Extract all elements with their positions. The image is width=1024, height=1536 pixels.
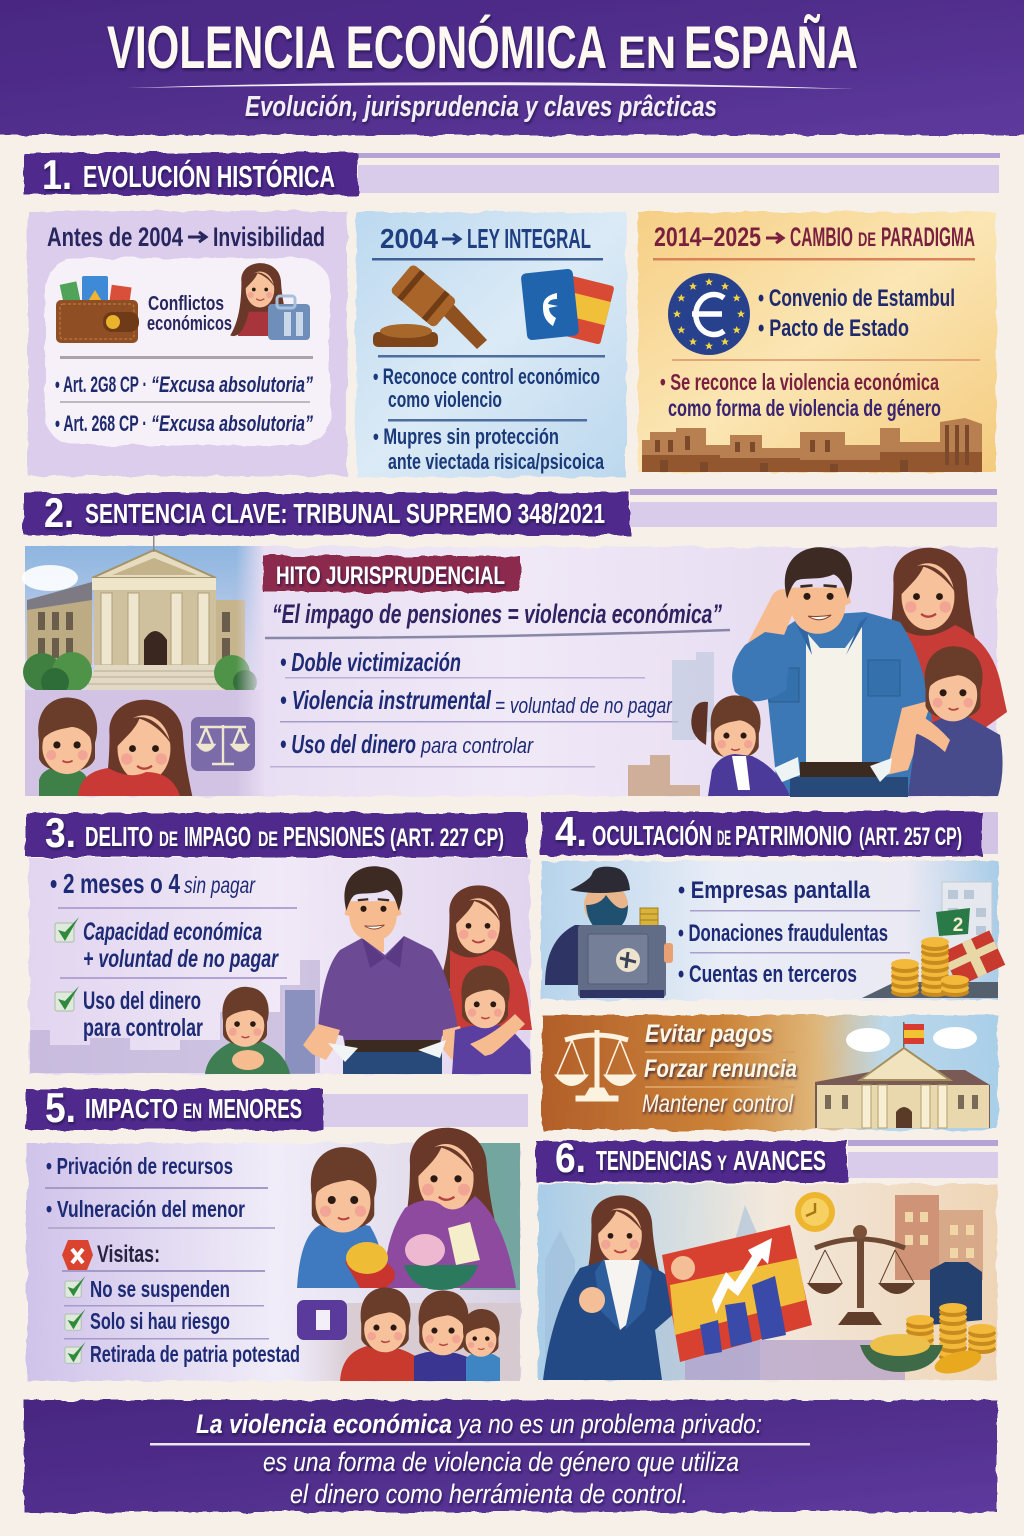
conclusion text: La violencia económica [196,1409,452,1439]
title: EN [618,27,676,78]
item: capacidad economica: + voluntad de no pagar [83,945,279,973]
illustration: family with empty pockets [205,866,532,1074]
section 2 heading: SENTENCIA CLAVE: TRIBUNAL SUPREMO 348/2021 [85,498,605,529]
conclusion text [196,1409,762,1509]
section 3 heading: DE [159,828,178,851]
conclusion text: ya no es un problema privado: [456,1409,762,1439]
label: conflictos economicos: económicos [147,313,232,335]
illustration: businesswoman [543,1195,692,1380]
visit rule: retirada [65,1341,300,1367]
label: conflictos economicos: Conflictos [148,293,224,315]
bullet: reconoce: • Reconoce control económico [373,364,600,389]
section 6 heading: AVANCES [733,1145,826,1176]
conclusion banner [24,1400,997,1512]
bullet: 2 meses o 4: sin pagar [184,872,256,898]
panel title: CAMBIO [790,222,853,252]
subtitle: Evolución, jurisprudencia y claves prâcticas [245,91,717,123]
bullet: violencia instrumental: = voluntad de no pagar [495,693,673,718]
section 3 heading: (ART. 227 CP) [390,824,504,852]
list: convenio: • Convenio de Estambul [758,285,955,312]
list: asset hiding: • Donaciones fraudulentas [678,920,888,947]
bullet: mupres [373,424,605,474]
label: visitas: Visitas: [97,1241,160,1268]
bullet: art 268 second [55,411,313,436]
icon: gold clock [795,1192,835,1232]
section 3 heading: IMPAGO [184,821,251,852]
fade edge [236,546,264,796]
icon: woman with bag [230,263,310,340]
section 4 heading [541,808,998,856]
tag: hito jurisprudencial: HITO JURISPRUDENCIAL [276,562,505,590]
skyline background [30,960,320,1073]
header banner [0,0,1024,135]
list: convenio: • Pacto de Estado [758,315,909,342]
section 5 heading: MENORES [208,1093,302,1124]
section 4 heading: PATRIMONIO [735,820,852,851]
bullet: art 268 second: • Art. 268 CP · [55,411,147,436]
visit rule: no se suspenden [65,1276,230,1302]
panel: impacto en menores [27,1128,520,1381]
bullet: violencia instrumental: • Violencia instrumental [280,685,492,715]
label: conflictos economicos [147,293,232,335]
list: evitar pagos: Forzar renuncia [644,1055,797,1083]
icon: EU euro circle [668,273,750,355]
statement [660,369,941,421]
illustration: coins and building: 2 [953,915,963,936]
icon: check second [55,986,79,1011]
section 2 heading: 2. [44,489,74,536]
panel: ocultacion de patrimonio [541,861,1005,1000]
panel: objetivos [542,1015,998,1130]
bullet: art 268: • Art. 2G8 CP · [55,372,147,397]
tag: hito jurisprudencial [263,556,520,592]
item: capacidad economica [83,918,279,973]
bullet: 2 meses o 4: • 2 meses o 4 [50,868,180,899]
bullet: uso del dinero: para controlar [420,733,534,758]
section 6 heading [536,1134,998,1182]
list: privacion: • Privación de recursos [46,1153,233,1179]
bullet: doble victimizacion: • Doble victimización [280,647,461,677]
skyline background [545,1195,983,1380]
panel: tendencias y avances [538,1184,997,1380]
bullet: uso del dinero: • Uso del dinero [280,729,416,759]
panel: antes de 2004 [28,211,347,476]
section 6 heading: Y [717,1152,727,1175]
icon: scales tile [191,717,255,771]
section 5 heading: 5. [45,1084,76,1131]
conclusion text: es una forma de violencia de género que utiliza [263,1447,739,1477]
title rule [127,82,854,89]
panel title: DE [858,230,876,251]
section 4 heading: 4. [555,808,587,855]
panel title [47,222,325,252]
illustration: family [628,547,1007,797]
skyline [642,418,982,472]
illustration: hooded man with safe [545,867,673,998]
list: asset hiding: • Cuentas en terceros [678,961,857,988]
section 1 heading [24,151,1000,198]
section 3 heading: DE [258,828,278,851]
section 3 heading [26,809,527,857]
illustration: children [290,1287,520,1381]
title: ESPAÑA [684,14,858,81]
panel: sentencia clave [22,536,1007,798]
icon: wallet with cards [56,276,139,343]
section 3 heading: DELITO [85,821,153,852]
section 4 heading: (ART. 257 CP) [859,823,962,851]
item: uso del dinero: para controlar [83,1014,203,1042]
panel title [380,223,591,254]
list: evitar pagos: Evitar pagos [645,1020,773,1048]
section 1 heading: EVOLUCIÓN HISTÓRICA [83,158,335,194]
bullet: art 268 [55,372,313,397]
panel title: LEY INTEGRAL [467,223,591,254]
panel title: Invisibilidad [213,222,325,252]
bullet: mupres: ante viectada risica/psicoica [388,449,605,474]
illustration: mother and son [297,1128,520,1290]
icon: x badge [62,1240,93,1270]
conclusion text: el dinero como herrámienta de control. [290,1479,688,1509]
list: evitar pagos [642,1020,797,1118]
illustration: court with flag [815,1022,990,1128]
visit rule: no se suspenden: No se suspenden [90,1276,230,1302]
illustration: gold coins [860,1303,996,1378]
visit rule: retirada: Retirada de patria potestad [90,1341,300,1367]
section 3 heading: 3. [45,809,76,856]
bullet: art 268 second: “Excusa absolutoria” [151,411,313,436]
panel: 2014-2025 [638,212,996,472]
list: asset hiding [678,877,888,988]
section 5 heading: IMPACTO [85,1093,178,1124]
item: capacidad economica: Capacidad económica [83,918,262,946]
panel title [654,222,975,252]
illustration: coins and building [862,882,1005,998]
panel title: Antes de 2004 [47,222,183,252]
section 3 heading: PENSIONES [283,821,385,852]
bullet: art 268: “Excusa absolutoria” [151,372,313,397]
list: convenio [758,285,955,342]
section 6 heading: 6. [555,1134,586,1181]
list: privacion [46,1153,245,1222]
section 4 heading: DE [717,827,731,850]
section 1 heading: 1. [42,151,72,198]
visit rule: solo si hau riesgo [65,1308,230,1334]
illustration: mother and son [25,690,258,796]
section 4 heading: OCULTACIÓN [592,820,712,851]
list: asset hiding: • Empresas pantalla [678,877,871,904]
icon: white scales [555,1030,636,1101]
illustration: scales of justice [807,1225,915,1325]
bullet: reconoce: como violencio [388,387,502,412]
illustration: supreme court [22,536,262,696]
item: uso del dinero [83,987,203,1042]
icon: euro tile and spanish flag [521,268,615,345]
panel: delito de impago [29,858,532,1074]
section 2 heading [24,489,997,536]
title: VIOLENCIA ECONÓMICA [107,14,607,81]
bullet: reconoce [373,364,600,412]
visit rule: solo si hau riesgo: Solo si hau riesgo [90,1308,230,1334]
illustration: growth chart on flag [662,1225,812,1362]
icon: check [55,917,79,942]
list: evitar pagos: Mantener control [642,1090,794,1118]
section 5 heading: EN [183,1100,202,1123]
section 6 heading: TENDENCIAS [596,1145,712,1176]
panel: 2004 ley integral [356,212,626,477]
item: uso del dinero: Uso del dinero [83,987,201,1015]
icon: gavel [373,263,487,349]
section 5 heading [26,1084,528,1131]
bullet: violencia instrumental [280,685,673,718]
bullet: mupres: • Mupres sin protección [373,424,559,449]
list: privacion: • Vulneración del menor [46,1196,245,1222]
panel title: 2004 [380,223,438,254]
panel title: 2014–2025 [654,222,761,252]
quote: “El impago de pensiones = violencia económica” [272,599,722,629]
